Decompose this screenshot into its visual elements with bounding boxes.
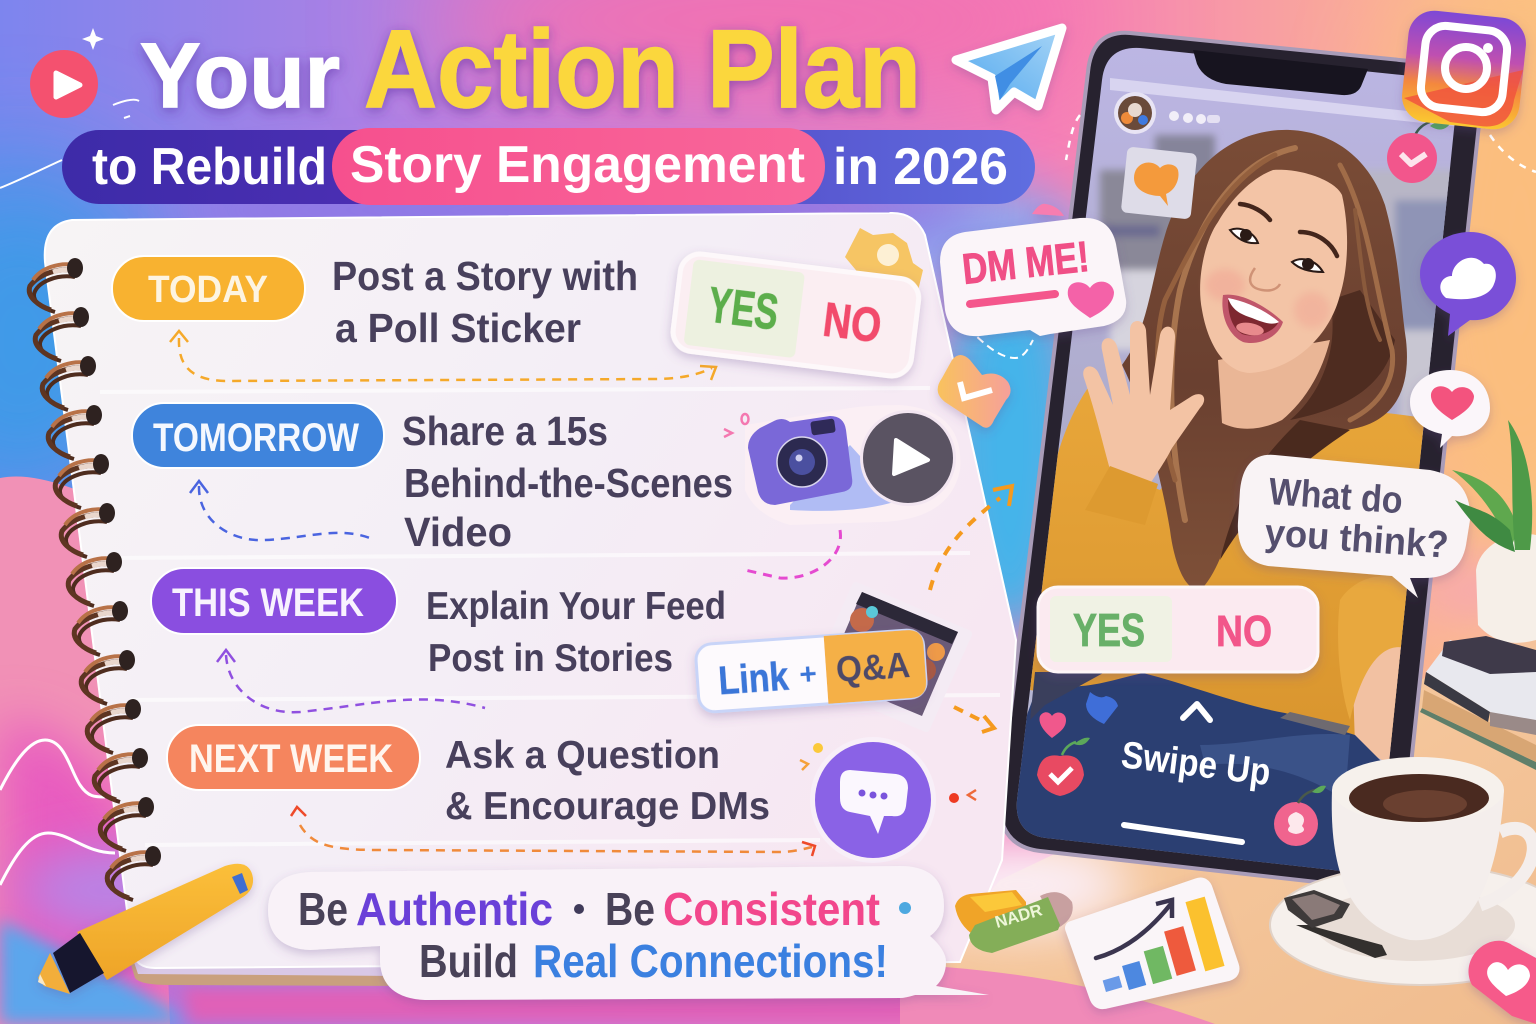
today pill bbox=[112, 256, 305, 321]
swipe up bbox=[1119, 704, 1273, 794]
icon: purple message bubble bbox=[800, 737, 976, 863]
chart card bbox=[1072, 885, 1232, 1002]
title: Your bbox=[140, 25, 340, 127]
woman: neck bbox=[1218, 340, 1330, 429]
sticker: heart check bbox=[938, 355, 1011, 428]
next week text: & Encourage DMs bbox=[445, 785, 770, 828]
bubble: what do you think: What do bbox=[1267, 471, 1404, 522]
icon: paper plane bbox=[956, 28, 1062, 110]
icon: eraser blocks: NADR bbox=[993, 900, 1044, 932]
phone bbox=[1000, 33, 1483, 890]
subtitle banner: Story Engagement bbox=[350, 136, 805, 194]
spiral binding bbox=[29, 258, 161, 900]
today text bbox=[332, 253, 638, 351]
icon: play badge bbox=[30, 28, 139, 118]
notebook page bbox=[45, 213, 1016, 968]
slogan bubble: Consistent bbox=[663, 883, 880, 935]
slogan bubble bbox=[268, 866, 989, 1000]
tomorrow text: Video bbox=[404, 509, 512, 555]
today dashed arrow bbox=[170, 331, 716, 381]
next week text bbox=[445, 734, 770, 828]
row: next week bbox=[167, 725, 976, 863]
smartwatch bbox=[1284, 890, 1387, 958]
bubble: heart bbox=[1410, 370, 1490, 448]
tomorrow dashed arrow bbox=[190, 481, 375, 540]
title: Action Plan bbox=[364, 8, 921, 131]
this week pill: THIS WEEK bbox=[172, 581, 364, 625]
this week text: Explain Your Feed bbox=[426, 585, 726, 628]
today pill: TODAY bbox=[148, 269, 268, 311]
row: today bbox=[112, 228, 923, 381]
feed photo sticker bbox=[814, 586, 968, 728]
plant bbox=[1452, 420, 1536, 643]
this week pill bbox=[151, 568, 397, 634]
subtitle banner: in 2026 bbox=[833, 138, 1008, 196]
row: tomorrow bbox=[132, 403, 960, 578]
orange arrow to phone bbox=[930, 486, 1012, 590]
slogan bubble: Build bbox=[419, 935, 518, 987]
notebook page stack bbox=[128, 950, 700, 986]
bubble: what do you think bbox=[1238, 455, 1470, 598]
bubble: purple chat bbox=[1420, 232, 1516, 336]
woman: mouth bbox=[1222, 295, 1283, 343]
story avatar and dots bbox=[1114, 92, 1220, 134]
today text: a Poll Sticker bbox=[335, 305, 581, 351]
decorative swoosh lines bbox=[0, 115, 1536, 885]
poll card yes no bbox=[671, 252, 921, 378]
swipe up: Swipe Up bbox=[1119, 734, 1273, 794]
bubble: DM ME bbox=[940, 204, 1126, 336]
link and q&a sticker: Q&A bbox=[835, 644, 911, 690]
woman: waving hand bbox=[1083, 321, 1204, 484]
tomorrow text: Share a 15s bbox=[402, 408, 608, 454]
icon: camera and play bbox=[724, 405, 960, 525]
woman: hair bbox=[1122, 130, 1407, 589]
slogan bubble: Be bbox=[605, 883, 655, 935]
small orange arrow bbox=[954, 707, 994, 732]
magenta dashed arrow bbox=[745, 530, 840, 578]
poll card on phone bbox=[1038, 587, 1318, 672]
woman: hair strands bbox=[1158, 148, 1393, 520]
instagram icon bbox=[1399, 8, 1529, 132]
swipe indicator bar bbox=[1124, 825, 1242, 842]
link and q&a sticker: Link bbox=[717, 655, 791, 703]
poll card yes no: YES bbox=[705, 276, 781, 341]
slogan bubble: Authentic bbox=[356, 883, 553, 935]
poll card on phone: NO bbox=[1216, 607, 1272, 656]
slogan bubble: Be bbox=[298, 883, 348, 935]
phone screen photo bbox=[1016, 48, 1454, 871]
icon: eraser blocks bbox=[955, 890, 1073, 953]
subtitle banner bbox=[62, 128, 1035, 205]
phone stickers bbox=[1037, 692, 1326, 846]
link and q&a sticker: + bbox=[798, 658, 818, 692]
notebook stack and phone on desk bbox=[1420, 636, 1536, 770]
tomorrow text bbox=[402, 408, 733, 555]
notebook bbox=[45, 213, 1016, 986]
woman: right forearm bbox=[1354, 645, 1402, 760]
bubble: what do you think: you think? bbox=[1263, 512, 1450, 567]
link and q&a sticker bbox=[695, 629, 927, 713]
title bbox=[140, 8, 921, 131]
this week text: Post in Stories bbox=[428, 637, 673, 680]
today text: Post a Story with bbox=[332, 253, 638, 299]
subtitle banner: to Rebuild bbox=[92, 138, 327, 196]
phone notch bbox=[1193, 50, 1368, 95]
pen bbox=[38, 864, 253, 994]
woman: eyes and brows bbox=[1240, 204, 1337, 256]
poll card yes no: NO bbox=[820, 294, 884, 353]
row: this week bbox=[151, 568, 994, 732]
woman: sweater bbox=[1030, 385, 1440, 745]
pink highlight pill bbox=[332, 128, 825, 205]
next week dashed arrow bbox=[291, 807, 815, 856]
woman: jeans bbox=[1016, 674, 1380, 871]
next week text: Ask a Question bbox=[445, 734, 720, 777]
woman: face bbox=[1200, 170, 1347, 373]
poll card on phone: YES bbox=[1073, 604, 1145, 656]
sticker: orange heart bubble bbox=[1121, 147, 1197, 219]
this week text bbox=[426, 585, 726, 680]
tomorrow pill bbox=[132, 403, 384, 468]
tomorrow text: Behind-the-Scenes bbox=[404, 460, 733, 506]
tomorrow pill: TOMORROW bbox=[153, 416, 359, 460]
icon: corner heart bbox=[1469, 941, 1536, 1024]
next week pill bbox=[167, 725, 420, 790]
coffee cup and saucer bbox=[1270, 757, 1536, 985]
sticker: pink check cherry bbox=[1387, 121, 1450, 183]
slogan bubble: Real Connections! bbox=[533, 935, 888, 987]
next week pill: NEXT WEEK bbox=[189, 737, 393, 781]
this week dashed arrow bbox=[217, 650, 485, 712]
icon: camera sticker bbox=[845, 228, 923, 295]
bubble: DM ME: DM ME! bbox=[960, 233, 1091, 294]
